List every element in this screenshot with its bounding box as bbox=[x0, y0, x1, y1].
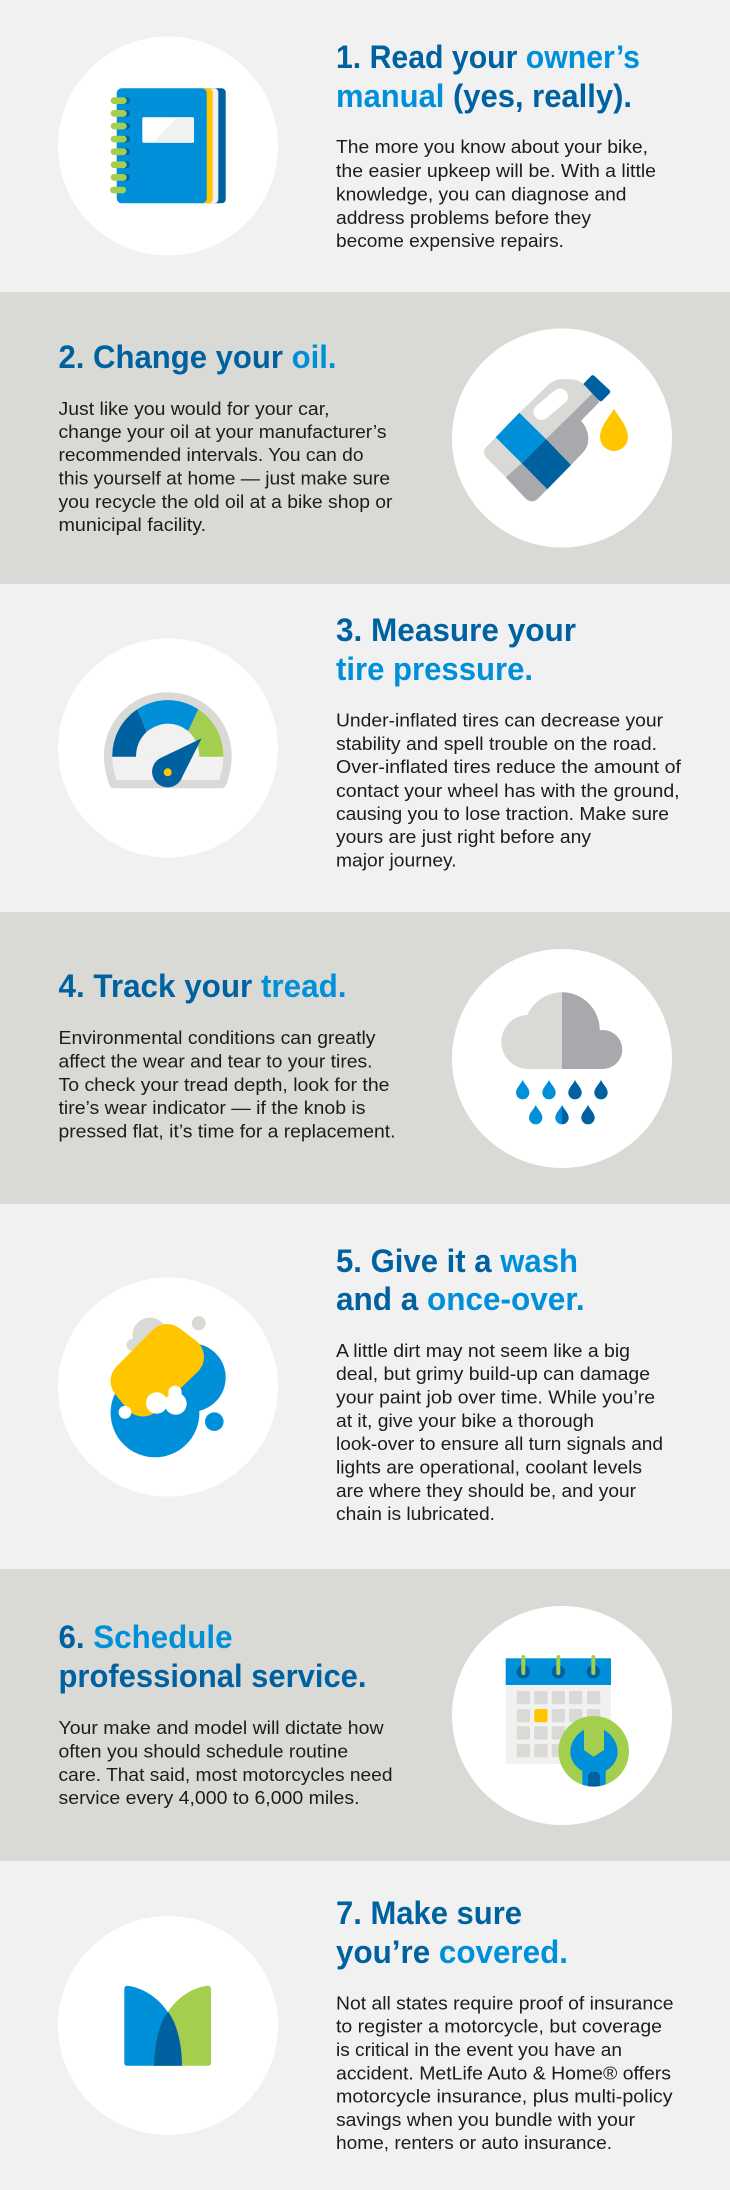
heading: step 2: 2. Change your oil. bbox=[58, 339, 336, 375]
body text: step 3: causing you to lose traction. Make sure bbox=[336, 804, 669, 824]
heading: step 1: 1. Read your owner’s bbox=[336, 39, 640, 75]
body text: step 2: this yourself at home — just make sure bbox=[58, 468, 390, 488]
heading: step 5 bbox=[336, 1243, 585, 1317]
heading: step 7: you’re covered. bbox=[336, 1934, 568, 1970]
panel: step 3 measure your tire pressure bbox=[0, 584, 730, 912]
body text: step 2: municipal facility. bbox=[58, 515, 206, 535]
body text: step 7: is critical in the event you have an bbox=[336, 2040, 622, 2060]
body text: step 7: to register a motorcycle, but coverage bbox=[336, 2017, 662, 2037]
panel: step 4 track your tread bbox=[0, 912, 730, 1204]
body text: step 3: major journey. bbox=[336, 851, 457, 871]
body text: step 3 bbox=[336, 711, 682, 871]
icon circle: step 4 bbox=[452, 949, 672, 1168]
body text: step 5: deal, but grimy build-up can damage bbox=[336, 1364, 650, 1384]
icon: calendar with wrench bbox=[506, 1655, 629, 1790]
body text: step 5: your paint job over time. While you’re bbox=[336, 1388, 655, 1408]
body text: step 7 bbox=[336, 1993, 674, 2153]
icon: oil bottle bbox=[484, 375, 628, 501]
body text: step 1: become expensive repairs. bbox=[336, 231, 564, 251]
panel: step 1 read your owner's manual bbox=[0, 0, 730, 292]
icon circle: step 1 bbox=[58, 36, 278, 256]
icon circle: step 3 bbox=[58, 638, 278, 858]
body text: step 2: you recycle the old oil at a bike shop or bbox=[58, 492, 392, 512]
body text: step 3: contact your wheel has with the ground, bbox=[336, 781, 680, 801]
icon: notebook bbox=[110, 88, 226, 203]
icon circle: step 5 bbox=[58, 1278, 278, 1496]
body text: step 5: lights are operational, coolant levels bbox=[336, 1458, 642, 1478]
body text: step 1 bbox=[336, 137, 656, 251]
body text: step 3: Over-inflated tires reduce the amount of bbox=[336, 757, 682, 777]
body text: step 6: Your make and model will dictate how bbox=[58, 1718, 385, 1738]
body text: step 7: savings when you bundle with your bbox=[336, 2110, 635, 2130]
body text: step 5 bbox=[336, 1341, 663, 1524]
body text: step 7: motorcycle insurance, plus multi-policy bbox=[336, 2087, 673, 2107]
heading: step 5: and a once-over. bbox=[336, 1281, 585, 1317]
body text: step 5: A little dirt may not seem like a big bbox=[336, 1341, 630, 1361]
heading: step 5: 5. Give it a wash bbox=[336, 1243, 578, 1279]
body text: step 7: home, renters or auto insurance. bbox=[336, 2133, 612, 2153]
body text: step 4: affect the wear and tear to your tires. bbox=[58, 1052, 372, 1072]
panel: step 6 schedule professional service bbox=[0, 1569, 730, 1861]
body text: step 5: are where they should be, and your bbox=[336, 1481, 636, 1501]
icon: soap and bubbles bbox=[111, 1316, 226, 1457]
heading: step 7 bbox=[336, 1895, 568, 1970]
heading: step 7: 7. Make sure bbox=[336, 1895, 522, 1931]
heading: step 3: tire pressure. bbox=[336, 651, 533, 687]
body text: step 2 bbox=[58, 399, 392, 535]
body text: step 3: stability and spell trouble on the road. bbox=[336, 734, 657, 754]
body text: step 2: Just like you would for your car, bbox=[58, 399, 330, 419]
body text: step 1: address problems before they bbox=[336, 208, 591, 228]
body text: step 6: often you should schedule routine bbox=[58, 1742, 348, 1762]
body text: step 1: the easier upkeep will be. With a little bbox=[336, 161, 656, 181]
body text: step 5: at it, give your bike a thorough bbox=[336, 1411, 594, 1431]
body text: step 1: The more you know about your bike, bbox=[336, 137, 648, 157]
body text: step 1: knowledge, you can diagnose and bbox=[336, 184, 626, 204]
body text: step 2: change your oil at your manufacturer’s bbox=[58, 422, 387, 442]
icon: pressure gauge bbox=[104, 692, 232, 788]
body text: step 7: Not all states require proof of insurance bbox=[336, 1993, 674, 2013]
heading: step 3: 3. Measure your bbox=[336, 612, 576, 648]
body text: step 4: Environmental conditions can greatly bbox=[58, 1028, 376, 1048]
body text: step 4: To check your tread depth, look for the bbox=[58, 1075, 390, 1095]
body text: step 6 bbox=[58, 1718, 392, 1808]
icon: rain cloud bbox=[501, 992, 622, 1124]
body text: step 3: Under-inflated tires can decrease your bbox=[336, 711, 663, 731]
icon circle: step 6 bbox=[452, 1606, 672, 1825]
body text: step 6: service every 4,000 to 6,000 miles. bbox=[58, 1788, 360, 1808]
heading: step 4: 4. Track your tread. bbox=[58, 968, 346, 1004]
panel: step 7 make sure you're covered bbox=[0, 1861, 730, 2190]
body text: step 5: look-over to ensure all turn signals and bbox=[336, 1434, 663, 1454]
body text: step 2: recommended intervals. You can do bbox=[58, 445, 364, 465]
heading: step 3 bbox=[336, 612, 576, 687]
body text: step 7: accident. MetLife Auto & Home® offers bbox=[336, 2063, 671, 2083]
heading: step 1: manual (yes, really). bbox=[336, 78, 632, 114]
panel: step 5 give it a wash bbox=[0, 1204, 730, 1569]
body text: step 6: care. That said, most motorcycles need bbox=[58, 1765, 392, 1785]
heading: step 6: professional service. bbox=[58, 1658, 366, 1694]
body text: step 5: chain is lubricated. bbox=[336, 1504, 495, 1524]
heading: step 6 bbox=[58, 1619, 366, 1694]
panel: step 2 change your oil bbox=[0, 292, 730, 584]
icon circle: step 7 bbox=[58, 1916, 278, 2135]
body text: step 4 bbox=[58, 1028, 395, 1142]
body text: step 3: yours are just right before any bbox=[336, 827, 591, 847]
body text: step 4: tire’s wear indicator — if the knob is bbox=[58, 1098, 366, 1118]
heading: step 1 bbox=[336, 39, 640, 114]
heading: step 6: 6. Schedule bbox=[58, 1619, 232, 1655]
icon: MetLife logo bbox=[124, 1986, 211, 2066]
body text: step 4: pressed flat, it’s time for a replacement. bbox=[58, 1122, 395, 1142]
icon circle: step 2 bbox=[452, 328, 672, 548]
